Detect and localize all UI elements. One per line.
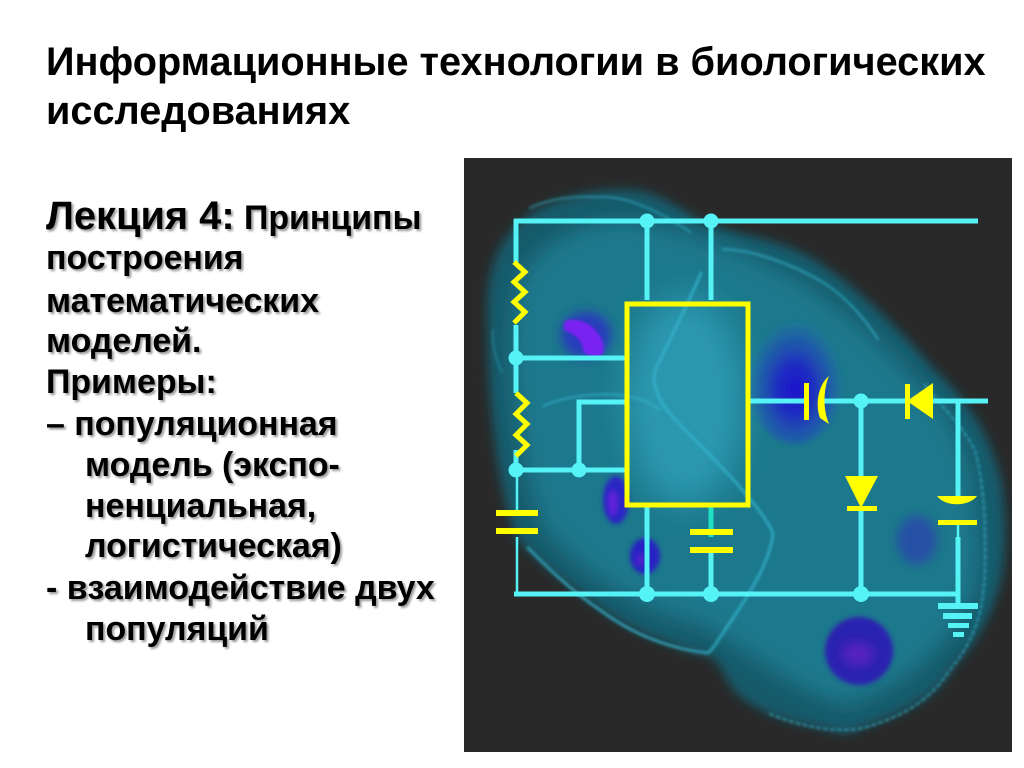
circuit nodes xyxy=(508,214,869,602)
text block: lecture description: – популяционная xyxy=(46,405,338,443)
circuit components xyxy=(496,262,977,553)
nucleus: under box xyxy=(603,476,629,524)
resistor lower xyxy=(516,393,527,456)
image background xyxy=(464,158,1012,752)
cell body xyxy=(487,190,1005,734)
diode vertical xyxy=(845,476,878,511)
text block: lecture description: Лекция 4: Принципы xyxy=(46,194,421,238)
title: Информационные технологии в биологических xyxy=(46,40,986,84)
nucleus: right faint xyxy=(897,516,937,564)
nuclei xyxy=(561,300,937,685)
text block: lecture description: Примеры: xyxy=(46,363,217,401)
title xyxy=(46,40,986,133)
lead under box xyxy=(708,507,714,537)
cell membranes xyxy=(493,197,985,730)
text block: lecture description: ненциальная, xyxy=(85,487,316,525)
text block: lecture description: модель (экспо- xyxy=(85,446,340,484)
text block: lecture description xyxy=(46,194,437,650)
text block: lecture description: популяций xyxy=(85,610,269,648)
text block: lecture description: построения xyxy=(46,239,244,277)
capacitor left xyxy=(496,510,538,534)
diode horizontal xyxy=(905,383,933,419)
resistor upper xyxy=(514,262,525,323)
ground symbol xyxy=(938,603,978,637)
nucleus: large blurred centre xyxy=(745,300,845,444)
circuit wires xyxy=(514,219,988,605)
capacitor series xyxy=(804,376,829,424)
text block: lecture description: логистическая) xyxy=(85,527,342,565)
integrated circuit box xyxy=(627,304,748,505)
polarized capacitor right xyxy=(937,496,977,525)
nucleus: upper left xyxy=(561,312,611,358)
panel: cell micrograph with circuit xyxy=(464,158,1012,752)
nucleus: small lower xyxy=(630,538,660,574)
text block: lecture description: математических xyxy=(46,282,319,320)
text block: lecture description: моделей. xyxy=(46,322,201,360)
text block: lecture description: - взаимодействие двух xyxy=(46,569,435,607)
capacitor under box xyxy=(690,529,733,553)
title: исследованиях xyxy=(46,89,350,133)
nucleus: bottom xyxy=(825,617,893,685)
